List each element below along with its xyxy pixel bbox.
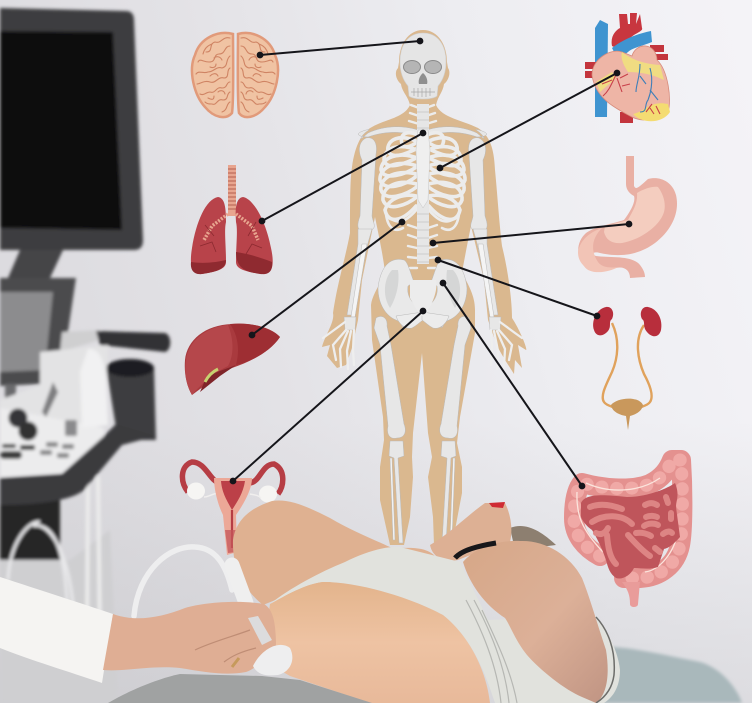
skeleton — [323, 33, 522, 543]
left gyri — [196, 38, 230, 112]
gallbladder — [205, 369, 218, 382]
knuckle shadows — [195, 630, 256, 662]
connector lines — [231, 39, 631, 488]
coat sleeve — [0, 577, 113, 683]
liver connector — [250, 220, 404, 337]
forearm and hand — [103, 602, 276, 674]
dark tray arm — [0, 424, 156, 505]
pillow — [595, 647, 742, 703]
ultrasound machine — [0, 8, 170, 703]
right gyri — [241, 38, 275, 112]
lungs connector — [260, 131, 425, 223]
colon highlight — [577, 478, 678, 572]
ultrasound probe cable — [134, 547, 246, 616]
shirt — [270, 547, 620, 703]
organ: brain — [192, 33, 278, 117]
left lung — [191, 197, 226, 274]
intestines connector — [441, 281, 584, 488]
clasped hands and foot — [430, 503, 511, 561]
trachea — [228, 165, 236, 216]
red vessel stubs — [585, 45, 668, 123]
ureters — [603, 323, 652, 407]
bronchi — [204, 214, 258, 240]
vena cava — [595, 20, 608, 117]
left kidney — [593, 307, 613, 335]
human body silhouette — [322, 30, 526, 545]
cup holder — [106, 359, 156, 440]
organ: uterus — [182, 462, 283, 555]
wedding ring — [232, 658, 239, 667]
lung shading — [191, 252, 272, 274]
small intestine — [581, 483, 680, 579]
sternum — [416, 130, 430, 208]
second screen — [0, 278, 76, 398]
organ: kidneys and bladder — [593, 307, 661, 430]
jeans — [108, 674, 372, 703]
bracelet — [455, 543, 496, 558]
patient — [108, 500, 742, 703]
shirt folds — [466, 600, 517, 703]
uterine body — [214, 478, 252, 555]
colon haustra — [574, 460, 682, 578]
shirt sleeve edge — [596, 617, 614, 703]
organ: stomach — [578, 156, 677, 278]
red nails — [489, 502, 505, 508]
belly — [262, 582, 490, 703]
organ: liver — [185, 324, 280, 395]
aorta — [612, 13, 642, 50]
main monitor — [0, 8, 143, 278]
probe head — [253, 645, 292, 675]
uterus connector — [231, 309, 425, 483]
sacrum — [410, 280, 436, 316]
organ: heart — [585, 13, 670, 123]
organ: intestines — [574, 460, 682, 607]
doctor arm and hand — [0, 577, 292, 683]
pulmonary artery — [612, 31, 652, 60]
kidneys connector — [436, 258, 599, 318]
intestinal loops — [590, 497, 672, 564]
heart connector — [438, 71, 619, 170]
left side bones — [323, 105, 423, 543]
handle bar — [60, 330, 170, 352]
hair — [510, 526, 556, 550]
ovaries — [187, 482, 205, 500]
fallopian tubes — [182, 462, 283, 494]
raised arm and knee — [463, 541, 608, 703]
skull — [400, 33, 446, 99]
right lung — [236, 197, 273, 274]
brain connector — [258, 39, 422, 57]
heart body — [592, 46, 670, 120]
spine — [417, 104, 429, 264]
machine stand and cables — [0, 476, 118, 703]
right hemisphere — [238, 33, 278, 117]
right kidney — [641, 307, 661, 336]
organ: lungs — [191, 165, 273, 274]
right side bones — [422, 105, 522, 543]
left hemisphere — [192, 33, 233, 117]
bladder — [611, 399, 643, 430]
raised left leg — [233, 500, 435, 605]
stomach connector — [431, 222, 631, 245]
coronary vessels — [602, 64, 660, 114]
colon body — [574, 460, 682, 578]
rectum — [622, 582, 640, 607]
yellow fat — [621, 52, 664, 80]
console panel — [0, 345, 108, 477]
